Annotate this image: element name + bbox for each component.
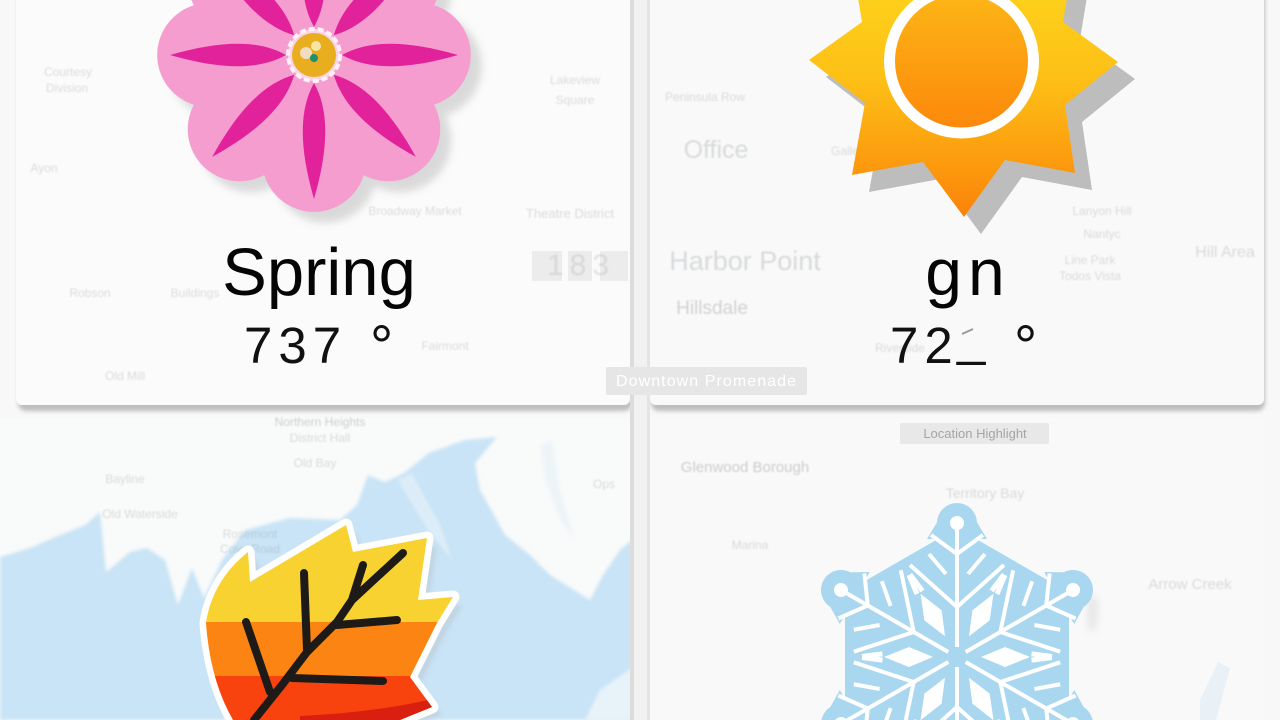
faint map labels: District Hall (290, 431, 350, 445)
text: spring temperature: ° (370, 314, 399, 379)
faint map labels: Division (46, 81, 88, 95)
faint map labels: Old Waterside (102, 507, 178, 521)
panel: spring card (16, 0, 632, 411)
faint map labels: Rosemont (223, 527, 278, 541)
sun core (890, 0, 1034, 133)
icon: spring flower (157, 0, 482, 223)
faint map labels: Line Park (1065, 253, 1116, 267)
panel: winter card (650, 418, 1264, 720)
tag: location label: Location Highlight (923, 426, 1027, 441)
faint map labels: Office (684, 136, 748, 164)
snowflake white cuts (834, 516, 1080, 720)
text: summer temperature: ° (1014, 314, 1043, 379)
faint map labels: Northern Heights (275, 415, 365, 429)
text: summer temperature (890, 309, 1043, 379)
faint map labels: Ayon (30, 161, 58, 175)
tag: location label (900, 423, 1049, 444)
faint map labels: Broadway Market (368, 204, 462, 218)
faint map labels: Arrow Creek (1148, 576, 1232, 593)
tag: downtown label: Downtown Promenade (616, 373, 796, 390)
faint map labels (30, 65, 1255, 593)
text: summer temperature: _ (956, 309, 991, 366)
faint map labels: Cove Road (220, 542, 280, 556)
faint map labels: Peninsula Row (665, 90, 745, 104)
text: spring title: Spring (222, 235, 416, 310)
faint map labels: Harbor Point (669, 246, 821, 276)
snowflake body (845, 528, 1069, 720)
faint map labels: Marina (732, 538, 769, 552)
faint map labels: Gallery (831, 144, 869, 158)
faint map labels: Lakeview (550, 73, 600, 87)
leaf colour bands (206, 525, 453, 720)
faint map labels: Bayline (105, 472, 145, 486)
faint map labels: Square (556, 93, 595, 107)
faint map labels: Hillsdale (676, 298, 748, 319)
icon: winter snowflake (809, 503, 1105, 720)
flower petals (170, 0, 458, 199)
faint map labels: Ops (593, 477, 615, 491)
faint map labels: Old Mill (105, 369, 145, 383)
faint map labels: Lanyon Hill (1072, 204, 1132, 218)
icon: autumn leaf (200, 518, 462, 720)
faint map labels: Territory Bay (946, 485, 1024, 501)
faint map labels: Riverside (875, 341, 925, 355)
faint map labels: Hill Area (1195, 244, 1255, 261)
faint map labels: Buildings (171, 286, 219, 300)
text: summer temperature: 72 (890, 317, 959, 374)
faint map labels: 183 (547, 249, 615, 282)
faint map labels: Glenwood Borough (681, 459, 809, 476)
icon: summer sun (809, 0, 1135, 234)
faint map labels: Todos Vista (1059, 269, 1121, 283)
leaf veins (246, 553, 403, 720)
faint map labels: Old Bay (294, 456, 336, 470)
faint map labels: Robson (69, 286, 111, 300)
text: summer title: gn (925, 235, 1011, 309)
gutters between cards (630, 0, 650, 720)
panel: summer card (650, 0, 1265, 411)
flower centre (288, 29, 340, 81)
faint map labels: Nantyc (1083, 227, 1121, 241)
faint map labels: Theatre District (526, 206, 614, 221)
tag: downtown label (606, 367, 807, 395)
panel: autumn card with water map (0, 418, 632, 720)
text: spring temperature: 737 (244, 317, 347, 374)
faint map labels: Fairmont (421, 339, 469, 353)
faint map labels: Courtesy (44, 65, 92, 79)
